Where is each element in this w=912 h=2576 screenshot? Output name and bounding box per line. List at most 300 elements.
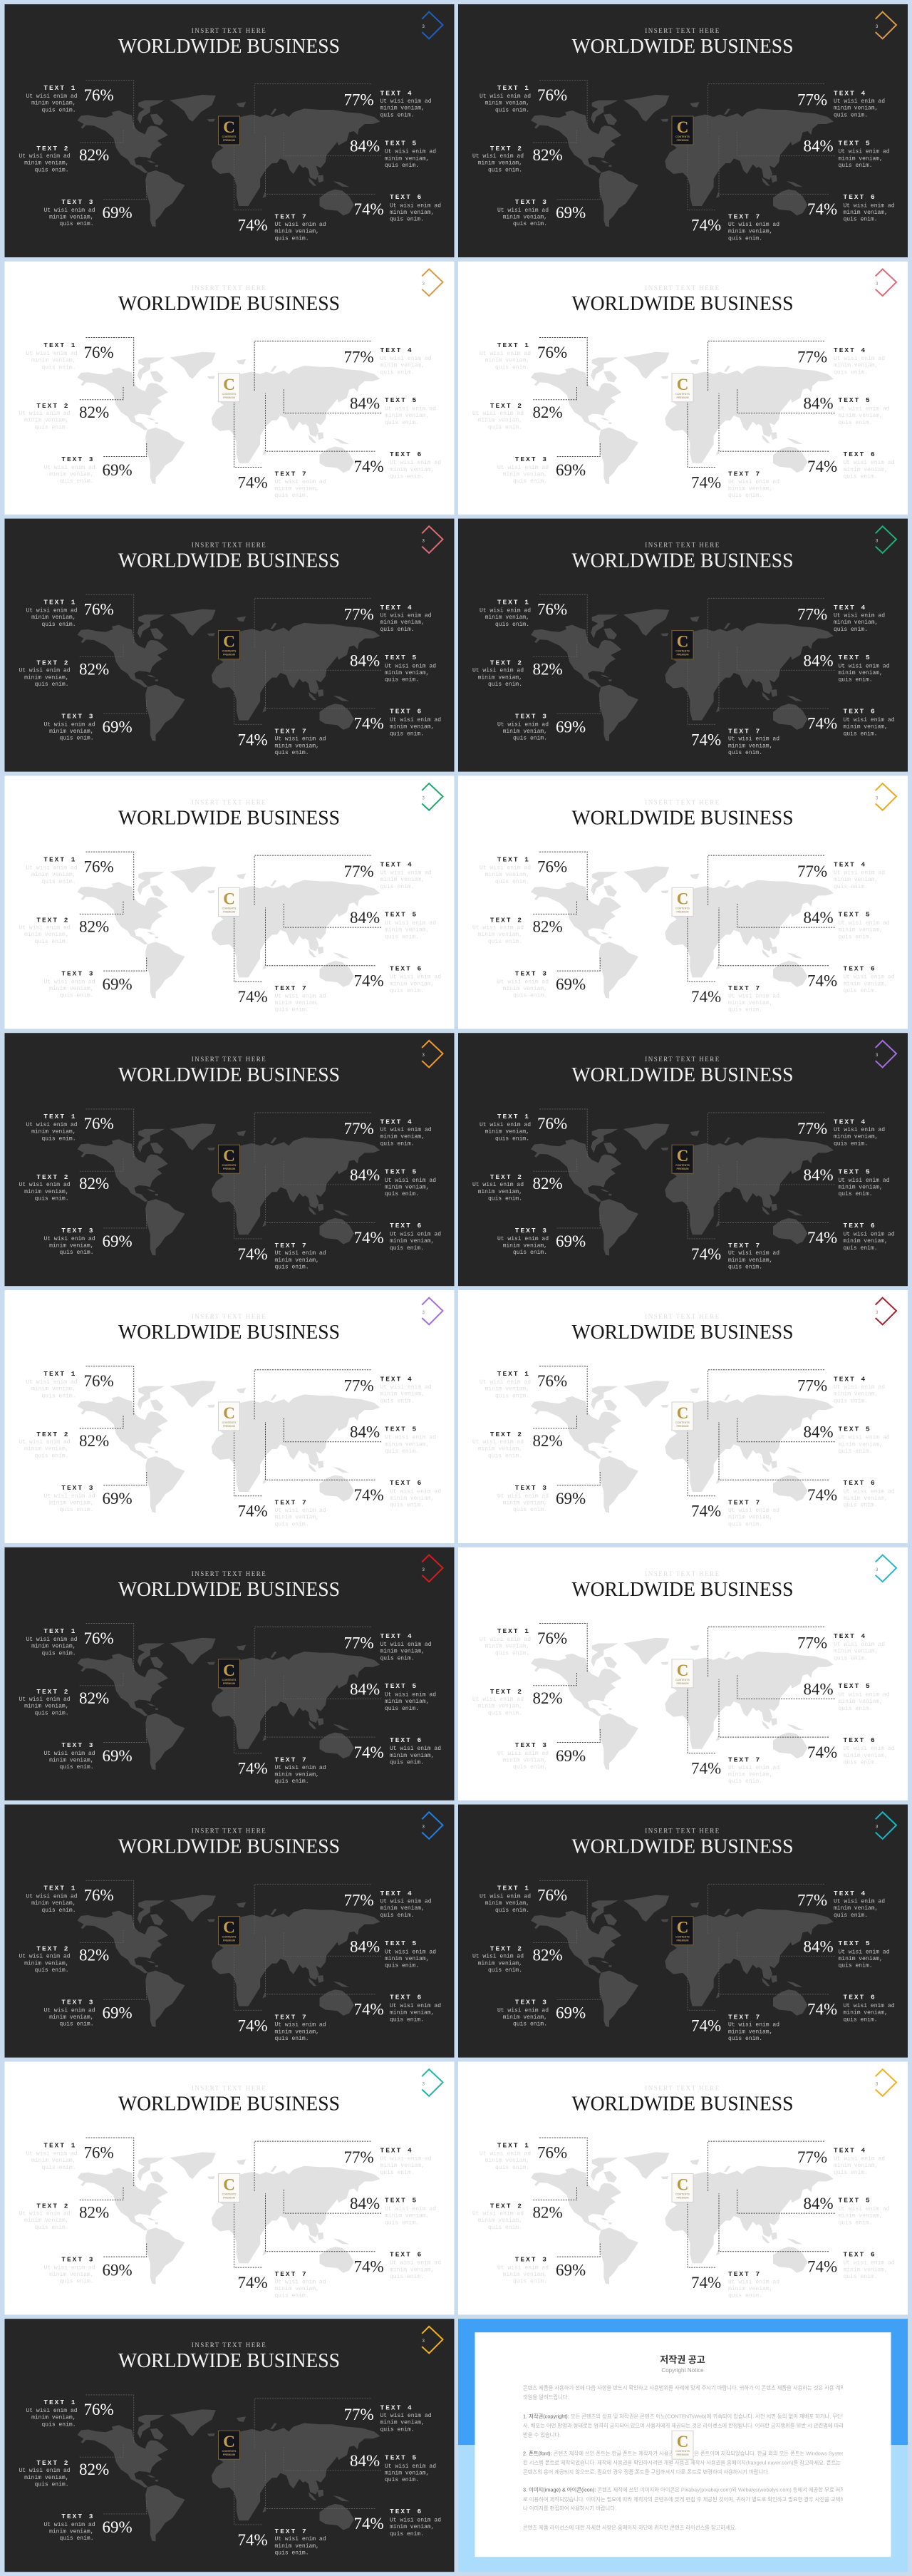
callout 2: 82% <box>533 1432 563 1450</box>
logo: C <box>223 890 235 907</box>
callout 6: quis enim. <box>844 473 878 480</box>
callout 7 <box>691 213 779 242</box>
callout 7: TEXT 7 <box>728 727 761 735</box>
callout 4: TEXT 4 <box>834 1632 866 1640</box>
callout 6 <box>807 964 895 994</box>
callout 4 <box>343 1890 432 1919</box>
callout 2: quis enim. <box>34 939 68 945</box>
callout 3 <box>43 969 133 999</box>
callout 2: 82% <box>79 1947 109 1964</box>
callout 6 <box>807 708 895 737</box>
copyright body text: 나 이미지를 편집하여 사용하시기 바랍니다. <box>523 2505 616 2512</box>
callout 4: quis enim. <box>834 627 868 633</box>
callout 1: quis enim. <box>495 1650 529 1657</box>
callout 7: quis enim. <box>728 750 762 756</box>
callout 7 <box>238 984 326 1014</box>
title: WORLDWIDE BUSINESS <box>571 1836 794 1858</box>
callout 4: quis enim. <box>380 1655 415 1661</box>
title: WORLDWIDE BUSINESS <box>571 1322 794 1344</box>
connector lines <box>533 852 835 982</box>
callout 2: quis enim. <box>488 1196 522 1202</box>
copyright panel <box>475 2332 891 2557</box>
page badge: 3 <box>876 25 879 29</box>
copyright body text <box>523 2385 843 2530</box>
callout 2: TEXT 2 <box>36 916 70 924</box>
logo: PREMIUM <box>677 2453 688 2456</box>
callout 7: minim veniam, <box>275 229 319 235</box>
slide 14: light, cyan badge <box>458 1547 908 1800</box>
callout 1 <box>480 1370 567 1400</box>
copyright body text: 3. 이미지(image) & 아이콘(icon): 콘텐츠 제작에 쓰인 이미지와 아이콘은 Pixabay(pixabay.com)와 Webalys(webalys.com) 등에서 제공한 무료 저작물 <box>523 2487 850 2493</box>
callout 5: quis enim. <box>838 1191 873 1197</box>
callout 1: quis enim. <box>41 622 76 628</box>
callout 7: Ut wisi enim ad <box>275 1250 326 1257</box>
logo <box>672 1402 693 1431</box>
callout 5 <box>804 1166 890 1197</box>
callout 4: Ut wisi enim ad <box>380 870 432 876</box>
world map <box>77 1895 380 2027</box>
callout 3 <box>497 969 586 999</box>
callout 4: minim veniam, <box>834 2163 878 2169</box>
copyright body text: 콘텐츠 제품 라이선스에 대한 자세한 사항은 홈페이지 하단에 위치한 콘텐츠 라이선스를 참고하세요. <box>523 2525 737 2531</box>
callout 7: Ut wisi enim ad <box>728 1508 779 1514</box>
slide 6: dark, green badge <box>458 519 908 772</box>
callout 3: 69% <box>556 1747 586 1765</box>
logo <box>218 2173 239 2202</box>
callout 5: quis enim. <box>385 1963 419 1969</box>
callout 6: Ut wisi enim ad <box>390 2260 441 2267</box>
callout 3: minim veniam, <box>49 471 94 478</box>
subtitle: INSERT TEXT HERE <box>192 798 266 805</box>
logo: PREMIUM <box>677 1939 688 1942</box>
callout 1: quis enim. <box>41 879 76 885</box>
callout 1: TEXT 1 <box>497 2141 530 2149</box>
callout 6: minim veniam, <box>390 1753 434 1759</box>
page badge: 3 <box>422 1311 425 1315</box>
callout 2 <box>472 402 563 431</box>
callout 2: TEXT 2 <box>490 1431 523 1438</box>
logo <box>218 631 239 659</box>
callout 6: quis enim. <box>844 217 878 223</box>
callout 4: Ut wisi enim ad <box>380 1127 432 1133</box>
callout 5: quis enim. <box>385 2477 419 2483</box>
callout 3: minim veniam, <box>49 2272 94 2278</box>
callout 4: TEXT 4 <box>834 89 866 97</box>
callout 7: Ut wisi enim ad <box>275 1508 326 1514</box>
callout 5: quis enim. <box>385 677 419 684</box>
callout 1: quis enim. <box>41 2165 76 2171</box>
callout 3: minim veniam, <box>503 728 547 735</box>
callout 5 <box>804 138 890 169</box>
connector lines <box>533 1109 835 1239</box>
callout 6: TEXT 6 <box>390 1479 423 1487</box>
callout 1: Ut wisi enim ad <box>26 1379 78 1386</box>
world map <box>531 1895 834 2027</box>
logo <box>218 1145 239 1173</box>
callout 6 <box>353 2250 441 2280</box>
callout 6: quis enim. <box>390 473 424 480</box>
title: WORLDWIDE BUSINESS <box>571 1579 794 1601</box>
callout 7: 74% <box>238 2274 268 2292</box>
callout 4: 77% <box>797 1377 827 1395</box>
callout 6 <box>807 1736 895 1766</box>
callout 1: minim veniam, <box>31 357 76 364</box>
logo: C <box>677 1661 688 1679</box>
logo <box>672 631 693 659</box>
callout 4: minim veniam, <box>380 619 425 626</box>
title: WORLDWIDE BUSINESS <box>118 1836 340 1858</box>
callout 5: minim veniam, <box>385 2213 429 2220</box>
callout 2: Ut wisi enim ad <box>19 2210 71 2217</box>
subtitle: INSERT TEXT HERE <box>192 1828 266 1835</box>
copyright body text: 콘텐츠의 용어 제공되지 않으므로, 필요한 경우 정품 폰트를 구입하셔서 다른 폰트로 변경하여 사용하시기 바랍니다. <box>523 2469 770 2475</box>
callout 1: Ut wisi enim ad <box>480 351 531 357</box>
callout 1: minim veniam, <box>485 100 529 107</box>
callout 6: Ut wisi enim ad <box>844 2003 895 2009</box>
callout 5 <box>804 909 890 940</box>
callout 2: quis enim. <box>34 2225 68 2231</box>
connector lines <box>80 1880 381 2010</box>
callout 4 <box>797 604 885 633</box>
callout 6: Ut wisi enim ad <box>390 1488 441 1495</box>
callout 3: minim veniam, <box>49 728 94 735</box>
subtitle: INSERT TEXT HERE <box>645 27 720 34</box>
callout 4: Ut wisi enim ad <box>834 98 885 105</box>
callout 3: Ut wisi enim ad <box>497 465 549 471</box>
logo: PREMIUM <box>677 1168 688 1170</box>
connector lines <box>80 81 381 210</box>
callout 5: quis enim. <box>385 934 419 940</box>
callout 6: Ut wisi enim ad <box>390 974 441 981</box>
logo: CONTENTS <box>222 907 237 910</box>
callout 2: Ut wisi enim ad <box>19 2468 71 2474</box>
callout 6: quis enim. <box>390 1760 424 1766</box>
callout 1: Ut wisi enim ad <box>480 1379 531 1386</box>
callout 4: TEXT 4 <box>380 89 413 97</box>
callout 7: TEXT 7 <box>275 2270 308 2278</box>
callout 7: minim veniam, <box>275 743 319 749</box>
callout 6: TEXT 6 <box>390 450 423 458</box>
world map <box>77 2152 380 2284</box>
slide 8: light, amber badge <box>458 776 908 1029</box>
page badge <box>422 1812 443 1839</box>
connector lines <box>80 1366 381 1496</box>
callout 4: quis enim. <box>834 2170 868 2176</box>
callout 1: quis enim. <box>495 1393 529 1400</box>
callout 7 <box>238 1242 326 1270</box>
callout 2: Ut wisi enim ad <box>19 411 71 417</box>
callout 3: quis enim. <box>59 1764 94 1771</box>
callout 5: minim veniam, <box>385 413 429 419</box>
callout 4: TEXT 4 <box>380 1118 413 1125</box>
callout 3: 69% <box>103 2261 133 2279</box>
callout 5 <box>350 1937 436 1969</box>
callout 1 <box>480 341 567 371</box>
callout 6: Ut wisi enim ad <box>844 2260 895 2267</box>
callout 6: TEXT 6 <box>844 193 876 201</box>
callout 3: TEXT 3 <box>515 713 548 721</box>
title: WORLDWIDE BUSINESS <box>571 293 794 315</box>
callout 5: 84% <box>350 1423 380 1441</box>
callout 3: Ut wisi enim ad <box>497 1493 549 1500</box>
copyright body text: 로 이용하여 제작되었습니다. 이미지는 필요에 따라 제작자의 콘텐츠에 맞게 편집 후 제공된 것이며, 귀하가 별도로 확인하고 필요한 경우 사진을 교체하여 <box>523 2496 850 2503</box>
callout 1: 76% <box>84 1115 114 1133</box>
callout 3: TEXT 3 <box>61 969 94 977</box>
callout 1: TEXT 1 <box>497 341 530 349</box>
callout 3: minim veniam, <box>503 1757 547 1763</box>
callout 3: quis enim. <box>59 1507 94 1513</box>
callout 5 <box>350 395 436 426</box>
slide 17: light, teal badge <box>4 2061 455 2314</box>
callout 3: Ut wisi enim ad <box>43 465 95 471</box>
callout 3: Ut wisi enim ad <box>43 1493 95 1500</box>
callout 3 <box>43 2255 133 2284</box>
callout 6: quis enim. <box>390 1245 424 1252</box>
callout 5: TEXT 5 <box>385 2197 418 2205</box>
callout 2: 82% <box>533 1175 563 1192</box>
callout 1: 76% <box>537 857 567 875</box>
connector lines <box>80 338 381 468</box>
callout 5: minim veniam, <box>838 1956 883 1962</box>
callout 1: 76% <box>84 2401 114 2418</box>
copyright body text: 콘텐츠 제품을 사용하기 전에 다음 사항을 반드시 확인하고 사용범위를 사례에 맞게 주시기 바랍니다. 귀하가 이 콘텐츠 제품을 사용하는 것은 사용 계약과 보호에 동의하는 <box>523 2385 886 2391</box>
callout 7: minim veniam, <box>728 743 772 749</box>
callout 2: 82% <box>533 661 563 679</box>
title: WORLDWIDE BUSINESS <box>118 1064 340 1086</box>
callout 1: Ut wisi enim ad <box>480 1894 531 1900</box>
callout 2: quis enim. <box>34 1196 68 1202</box>
callout 5: 84% <box>804 394 834 412</box>
callout 6: 74% <box>807 1743 837 1761</box>
callout 3: quis enim. <box>59 2278 94 2284</box>
callout 1: Ut wisi enim ad <box>26 2408 78 2414</box>
callout 5 <box>350 1423 436 1455</box>
page badge <box>876 1555 896 1582</box>
callout 5 <box>350 138 436 169</box>
logo <box>218 116 239 145</box>
callout 2: 82% <box>533 917 563 935</box>
logo <box>218 887 239 916</box>
title: WORLDWIDE BUSINESS <box>571 36 794 58</box>
callout 2 <box>472 2202 563 2231</box>
callout 3 <box>497 455 586 485</box>
page badge <box>876 269 896 296</box>
callout 5: 84% <box>804 909 834 927</box>
callout 5: minim veniam, <box>385 1699 429 1705</box>
callout 7 <box>238 470 326 499</box>
callout 2: TEXT 2 <box>490 402 523 410</box>
callout 1 <box>480 84 567 114</box>
callout 4: TEXT 4 <box>834 604 866 612</box>
callout 1: 76% <box>84 1887 114 1905</box>
copyright body text: 받을 수 있습니다. <box>523 2432 561 2438</box>
callout 5: 84% <box>350 909 380 927</box>
callout 7: minim veniam, <box>275 1257 319 1264</box>
page badge <box>422 1041 443 1068</box>
title: WORLDWIDE BUSINESS <box>118 1322 340 1344</box>
callout 6: minim veniam, <box>844 2267 888 2273</box>
callout 6: TEXT 6 <box>844 1994 876 2001</box>
callout 1: TEXT 1 <box>497 1885 530 1892</box>
callout 2: 82% <box>79 1175 109 1192</box>
title: WORLDWIDE BUSINESS <box>118 2093 340 2115</box>
callout 2 <box>472 659 563 688</box>
callout 4 <box>343 604 432 633</box>
connector lines <box>533 1624 835 1753</box>
callout 7 <box>691 727 779 756</box>
callout 3: quis enim. <box>59 1250 94 1256</box>
callout 3: minim veniam, <box>503 2014 547 2021</box>
page badge: 3 <box>422 540 425 544</box>
logo: C <box>223 1919 235 1937</box>
callout 6: TEXT 6 <box>390 2508 423 2515</box>
subtitle: INSERT TEXT HERE <box>645 1056 720 1063</box>
callout 1: TEXT 1 <box>43 2399 77 2406</box>
callout 4: quis enim. <box>834 1398 868 1404</box>
callout 3: quis enim. <box>513 736 547 742</box>
callout 5: quis enim. <box>385 163 419 169</box>
callout 2: minim veniam, <box>24 417 68 423</box>
callout 3 <box>43 713 133 742</box>
callout 6: Ut wisi enim ad <box>844 717 895 723</box>
callout 4: quis enim. <box>380 1398 415 1404</box>
callout 5: Ut wisi enim ad <box>838 2206 890 2212</box>
callout 5: 84% <box>350 2452 380 2470</box>
callout 6 <box>353 450 441 480</box>
callout 5: quis enim. <box>385 1706 419 1712</box>
callout 3: minim veniam, <box>503 1500 547 1507</box>
callout 4: TEXT 4 <box>380 604 413 612</box>
world map <box>531 609 834 741</box>
callout 7: quis enim. <box>728 1521 762 1527</box>
logo: CONTENTS <box>675 1679 690 1681</box>
callout 7: Ut wisi enim ad <box>728 1250 779 1257</box>
slide 15: dark, blue badge <box>4 1805 455 2058</box>
callout 3: 69% <box>556 1232 586 1250</box>
callout 5: 84% <box>804 1423 834 1441</box>
callout 3 <box>497 1227 586 1256</box>
callout 3: quis enim. <box>513 1764 547 1771</box>
callout 1: 76% <box>537 1115 567 1133</box>
callout 7: 74% <box>691 217 721 235</box>
callout 1: minim veniam, <box>31 1386 76 1393</box>
callout 4 <box>343 1118 432 1148</box>
callout 4: 77% <box>343 1891 374 1909</box>
logo <box>672 2173 693 2202</box>
logo: PREMIUM <box>223 2196 235 2199</box>
callout 2 <box>19 145 109 174</box>
page badge <box>876 526 896 553</box>
callout 1: Ut wisi enim ad <box>26 608 78 614</box>
logo: C <box>677 890 688 907</box>
callout 4: quis enim. <box>380 113 415 118</box>
callout 4 <box>343 89 432 118</box>
callout 4: TEXT 4 <box>380 861 413 869</box>
callout 1: minim veniam, <box>485 1643 529 1649</box>
callout 1: 76% <box>537 1629 567 1647</box>
callout 6: 74% <box>353 1743 384 1761</box>
callout 7: quis enim. <box>275 1264 309 1270</box>
callout 4 <box>343 346 432 376</box>
callout 1: Ut wisi enim ad <box>26 1122 78 1128</box>
callout 3 <box>43 1999 133 2028</box>
callout 6 <box>353 708 441 737</box>
logo <box>218 2431 239 2459</box>
callout 4: TEXT 4 <box>380 1375 413 1383</box>
logo: PREMIUM <box>677 2196 688 2199</box>
callout 4 <box>797 346 885 376</box>
callout 6: 74% <box>807 2001 837 2019</box>
callout 6: quis enim. <box>390 1503 424 1509</box>
connector lines <box>533 2138 835 2267</box>
callout 6: Ut wisi enim ad <box>844 202 895 209</box>
logo <box>218 1917 239 1945</box>
callout 7 <box>238 2528 326 2556</box>
callout 1: minim veniam, <box>31 872 76 878</box>
callout 5: 84% <box>350 2195 380 2212</box>
callout 4: 77% <box>797 1634 827 1652</box>
callout 3: minim veniam, <box>503 214 547 221</box>
callout 6: TEXT 6 <box>844 1479 876 1487</box>
title: WORLDWIDE BUSINESS <box>118 2350 340 2372</box>
callout 6: minim veniam, <box>844 981 888 987</box>
title: WORLDWIDE BUSINESS <box>571 807 794 829</box>
callout 2: minim veniam, <box>24 2475 68 2481</box>
title: WORLDWIDE BUSINESS <box>118 550 340 572</box>
page badge: 3 <box>876 796 879 800</box>
callout 6: 74% <box>353 1486 384 1504</box>
subtitle: INSERT TEXT HERE <box>645 2084 720 2091</box>
callout 1 <box>480 1885 567 1914</box>
callout 4 <box>797 89 885 118</box>
logo: PREMIUM <box>223 139 235 142</box>
callout 7: TEXT 7 <box>728 1499 761 1507</box>
callout 5: TEXT 5 <box>838 654 871 661</box>
callout 3: Ut wisi enim ad <box>497 207 549 214</box>
callout 7: 74% <box>691 1503 721 1520</box>
connector lines <box>80 594 381 724</box>
callout 7: quis enim. <box>275 1521 309 1527</box>
callout 6: 74% <box>807 200 837 218</box>
callout 7: Ut wisi enim ad <box>728 479 779 485</box>
page badge <box>876 12 896 38</box>
callout 2: TEXT 2 <box>36 2202 70 2210</box>
callout 3: 69% <box>103 2004 133 2022</box>
callout 5: TEXT 5 <box>385 396 418 404</box>
callout 7: quis enim. <box>275 2036 309 2042</box>
callout 3: quis enim. <box>513 1250 547 1256</box>
callout 4: minim veniam, <box>380 105 425 111</box>
callout 4: 77% <box>343 1377 374 1395</box>
callout 1 <box>26 1370 114 1400</box>
callout 7: quis enim. <box>728 1778 762 1785</box>
callout 4: quis enim. <box>380 1141 415 1148</box>
logo <box>672 116 693 145</box>
callout 7: 74% <box>691 473 721 492</box>
callout 6: TEXT 6 <box>844 2250 876 2258</box>
callout 7: 74% <box>691 1760 721 1778</box>
callout 6: 74% <box>353 1229 384 1247</box>
callout 5: Ut wisi enim ad <box>385 1178 436 1184</box>
callout 1: TEXT 1 <box>497 599 530 607</box>
callout 2: minim veniam, <box>478 417 522 423</box>
callout 2: 82% <box>79 2203 109 2221</box>
callout 5: TEXT 5 <box>838 139 871 147</box>
callout 1: minim veniam, <box>31 1643 76 1649</box>
logo: CONTENTS <box>222 2450 237 2453</box>
callout 1: quis enim. <box>41 1907 76 1914</box>
callout 1: quis enim. <box>495 1907 529 1914</box>
